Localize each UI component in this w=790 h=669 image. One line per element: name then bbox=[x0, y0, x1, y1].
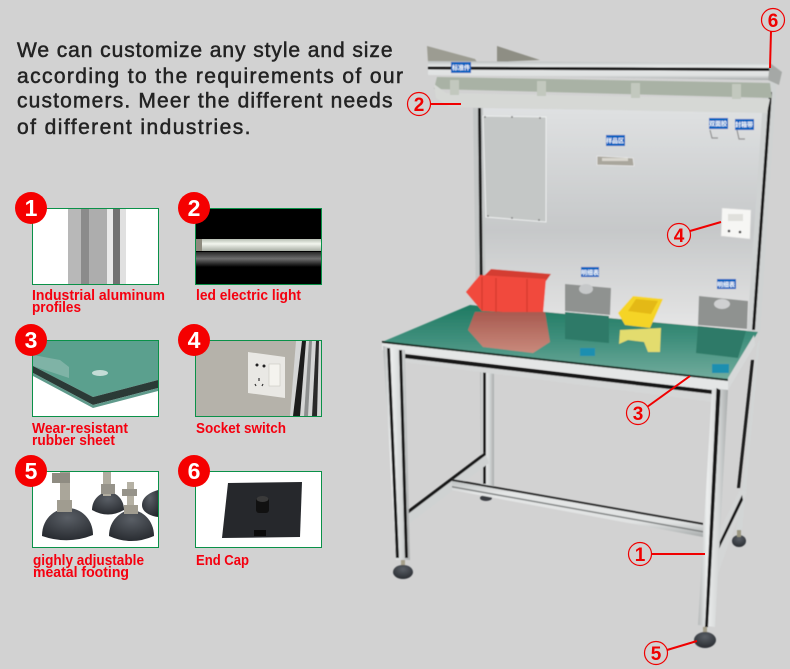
caption bbox=[32, 421, 128, 449]
thumbnail: glass corner bbox=[32, 340, 158, 416]
callout 3 bbox=[626, 376, 690, 425]
front beams bbox=[382, 341, 728, 402]
thumbnail: aluminum profile bbox=[32, 208, 158, 284]
callout 6 bbox=[762, 8, 784, 68]
panel: rubber sheet bbox=[15, 324, 158, 449]
number badge 2: 2 bbox=[188, 195, 200, 221]
panel: end cap bbox=[178, 455, 322, 569]
thumbnail: feet bbox=[32, 472, 158, 548]
caption: gighly adjustable bbox=[33, 553, 144, 569]
caption: meatal footing bbox=[33, 565, 129, 581]
top beam and wings bbox=[427, 46, 782, 85]
yellow bin bbox=[618, 296, 663, 352]
side and lower beams bbox=[408, 335, 755, 577]
blue labels: 样品区 bbox=[606, 137, 624, 145]
red bin bbox=[466, 269, 551, 353]
caption: End Cap bbox=[196, 553, 249, 569]
number badge 2 bbox=[178, 192, 210, 224]
headline text: customers. Meer the different needs bbox=[17, 90, 392, 112]
callout 4: 4 bbox=[674, 226, 685, 247]
acrylic pocket bbox=[483, 116, 546, 222]
callout 6: 6 bbox=[768, 11, 778, 32]
headline text: We can customize any style and size bbox=[17, 39, 392, 62]
back panel with frame bbox=[473, 76, 777, 335]
caption: Industrial aluminum bbox=[32, 288, 165, 304]
number badge 1: 1 bbox=[25, 195, 38, 221]
panel: adjustable footing bbox=[15, 455, 158, 581]
caption bbox=[32, 288, 165, 316]
blue labels: 封箱带 bbox=[735, 121, 753, 129]
back legs bbox=[480, 338, 760, 547]
socket bbox=[721, 208, 751, 239]
caption bbox=[33, 553, 144, 581]
panel: led light bbox=[178, 192, 322, 304]
blue labels: 标准件 bbox=[452, 64, 470, 72]
number badge 4: 4 bbox=[188, 327, 201, 353]
thumbnail: led tube bbox=[196, 208, 322, 284]
callout 2 bbox=[408, 92, 461, 116]
blue labels: 双面胶 bbox=[709, 120, 727, 128]
light fixture bbox=[434, 77, 772, 113]
caption: profiles bbox=[32, 300, 81, 316]
caption: Socket switch bbox=[196, 421, 286, 437]
headline text bbox=[17, 39, 403, 139]
number badge 1 bbox=[15, 192, 47, 224]
blue labels bbox=[451, 62, 754, 289]
panel: socket switch bbox=[178, 324, 322, 437]
callout 5: 5 bbox=[651, 644, 662, 665]
workbench illustration bbox=[382, 46, 782, 648]
number badge 5: 5 bbox=[25, 458, 38, 484]
caption: rubber sheet bbox=[32, 433, 115, 449]
headline text: according to the requirements of our bbox=[17, 65, 403, 88]
front legs bbox=[383, 346, 728, 627]
callout 1: 1 bbox=[635, 545, 646, 566]
callout 4 bbox=[668, 222, 721, 247]
number badge 3: 3 bbox=[25, 327, 37, 353]
metal holders bbox=[565, 284, 748, 358]
panel: aluminum profiles bbox=[15, 192, 165, 316]
headline text: of different industries. bbox=[17, 116, 250, 139]
number badge 6: 6 bbox=[188, 458, 200, 484]
number badge 4 bbox=[178, 324, 210, 356]
caption: Wear-resistant bbox=[32, 421, 128, 437]
table glass top bbox=[382, 305, 758, 380]
number badge 3 bbox=[15, 324, 47, 356]
thumbnail: end cap bbox=[196, 472, 322, 548]
blue labels: 明细表 bbox=[717, 281, 735, 289]
callout 2: 2 bbox=[414, 95, 424, 116]
callout 1 bbox=[628, 542, 705, 566]
number badge 6 bbox=[178, 455, 210, 487]
callout 3: 3 bbox=[633, 404, 643, 425]
callout 5 bbox=[644, 641, 697, 665]
number badge 5 bbox=[15, 455, 47, 487]
levelling feet bbox=[393, 560, 716, 648]
caption: led electric light bbox=[196, 288, 301, 304]
thumbnail: socket bbox=[196, 340, 322, 416]
blue labels: 明细表 bbox=[581, 269, 599, 277]
clip and hooks bbox=[597, 130, 745, 166]
glass reflected labels bbox=[580, 348, 729, 373]
